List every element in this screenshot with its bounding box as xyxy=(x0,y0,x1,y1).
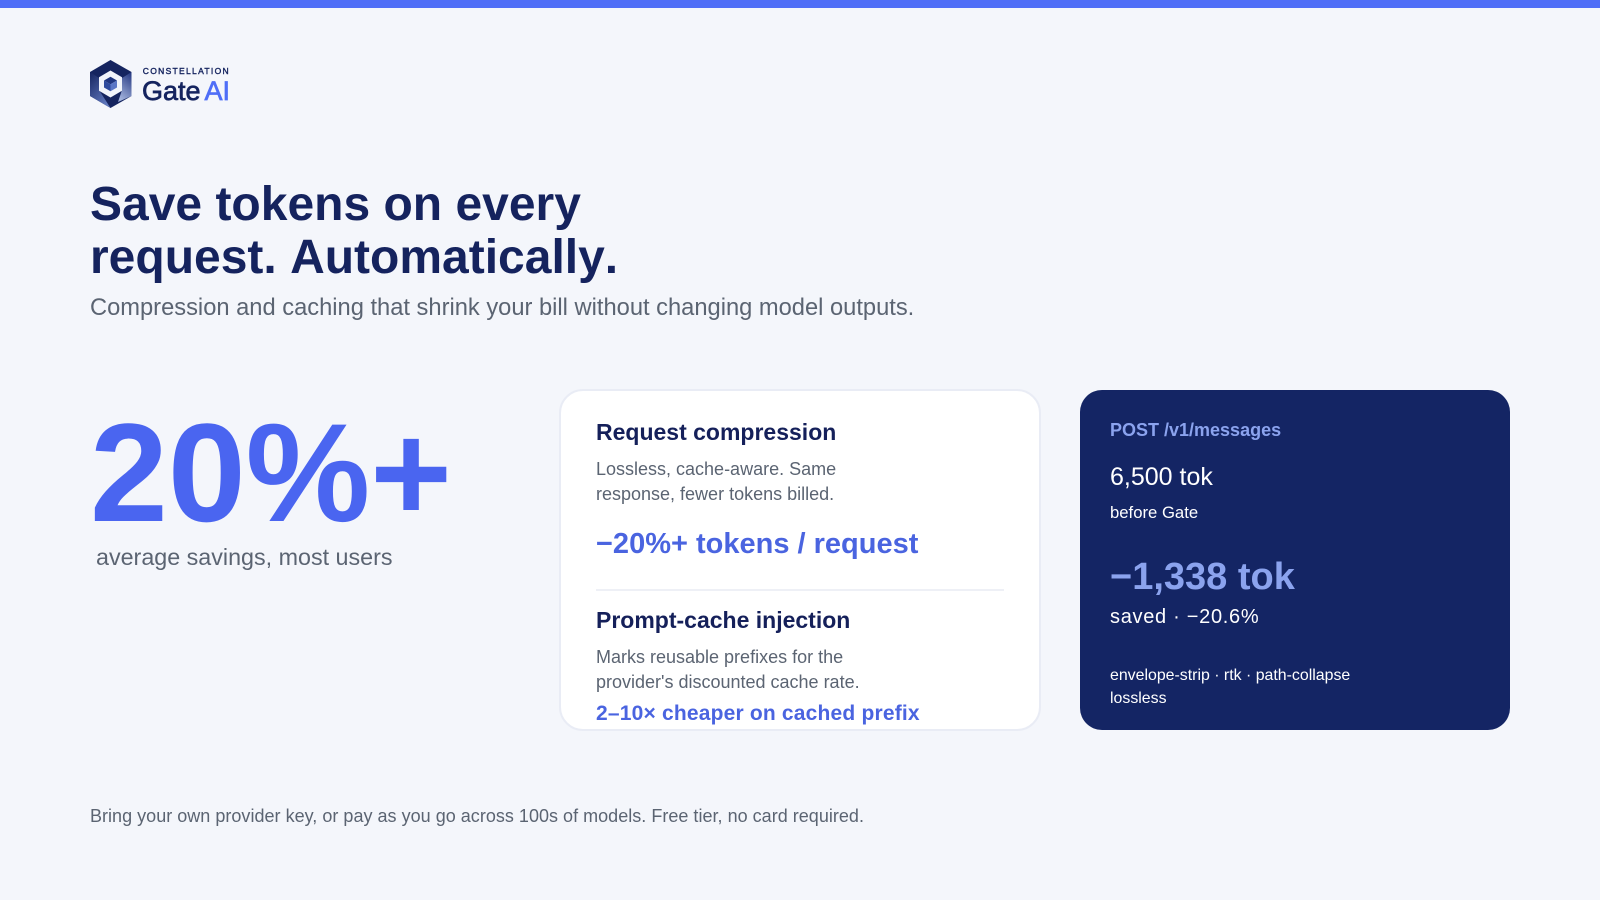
heading: request compression: Request compression xyxy=(596,419,836,445)
pipeline text: envelope-strip · rtk · path-collapse xyxy=(1110,667,1350,684)
saved count: −1,338 tok xyxy=(1110,556,1295,598)
logo wordmark: GateAI xyxy=(142,76,230,106)
text: cache description: Marks reusable prefixes for the xyxy=(596,647,843,667)
text: cache description: provider's discounted cache rate. xyxy=(596,672,860,692)
metric: cached prefix: 2–10× cheaper on cached prefix xyxy=(596,702,920,725)
text: compression description xyxy=(596,459,836,504)
title: Save tokens on every xyxy=(90,178,581,230)
big stat: 20%+ xyxy=(90,394,452,551)
panel: request example xyxy=(1080,390,1510,730)
saved label: saved · −20.6% xyxy=(1110,606,1259,628)
metric: tokens per request: −20%+ tokens / request xyxy=(596,528,918,560)
text: compression description: response, fewer tokens billed. xyxy=(596,484,834,504)
endpoint label: POST /v1/messages xyxy=(1110,420,1281,440)
subtitle: Compression and caching that shrink your bill without changing model outputs. xyxy=(90,295,914,321)
logo xyxy=(90,60,230,108)
pipeline text xyxy=(1110,667,1350,707)
logo small text: CONSTELLATION xyxy=(143,66,230,76)
stat label: average savings, most users xyxy=(96,544,393,570)
before label: before Gate xyxy=(1110,503,1198,522)
text: compression description: Lossless, cache-aware. Same xyxy=(596,459,836,479)
before count: 6,500 tok xyxy=(1110,463,1213,491)
title: request. Automatically. xyxy=(90,230,618,284)
title xyxy=(90,178,618,284)
icon: hexagon mark xyxy=(90,60,132,108)
pipeline text: lossless xyxy=(1110,690,1167,707)
text: cache description xyxy=(596,647,860,692)
heading: prompt cache: Prompt-cache injection xyxy=(596,607,850,633)
top accent bar xyxy=(0,0,1600,8)
panel: features xyxy=(559,389,1041,731)
footer note: Bring your own provider key, or pay as you go across 100s of models. Free tier, no card required. xyxy=(90,806,864,826)
